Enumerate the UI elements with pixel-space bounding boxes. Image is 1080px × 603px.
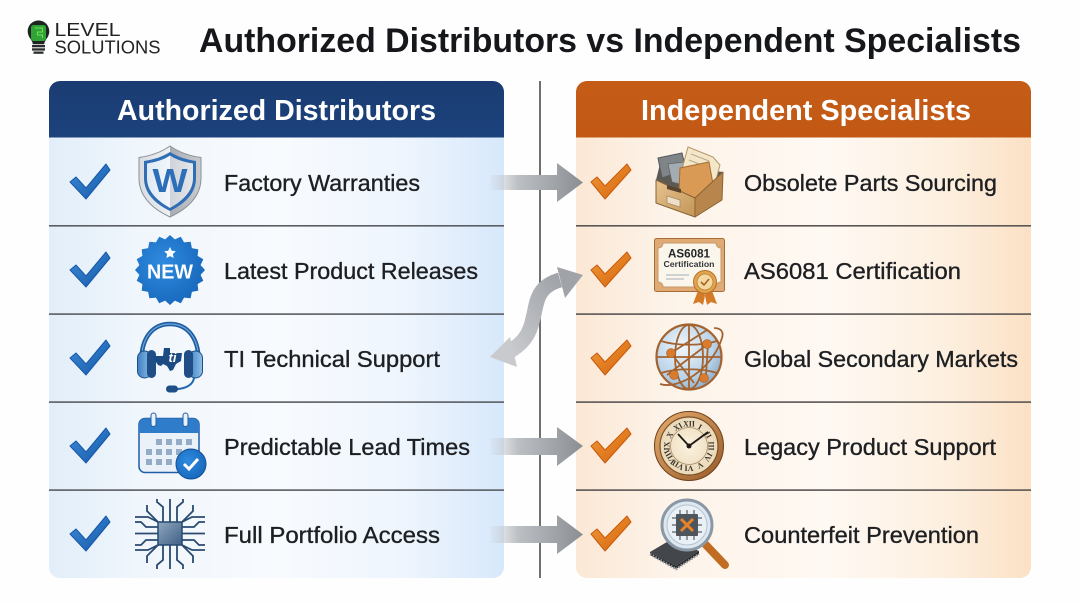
panel body <box>576 81 1031 578</box>
label: Latest Product Releases <box>224 258 478 284</box>
icon: certificate: AS6081 <box>668 248 711 260</box>
icon: globe <box>656 324 723 390</box>
panel body <box>49 81 504 578</box>
icon: microchip <box>135 499 205 569</box>
title: Authorized Distributors vs Independent Specialists <box>199 22 1021 60</box>
icon: file box <box>656 147 723 217</box>
label: Global Secondary Markets <box>744 346 1018 372</box>
logo <box>28 20 160 58</box>
logo wordmark <box>54 20 160 58</box>
panel: independent specialists <box>576 81 1031 578</box>
logo wordmark: LEVEL <box>54 20 120 40</box>
logo wordmark: SOLUTIONS <box>54 38 160 58</box>
center divider line <box>539 81 541 578</box>
check <box>70 164 110 199</box>
icon: warranty shield <box>139 146 201 217</box>
icon: antique clock: VII <box>671 458 685 472</box>
row: obsolete parts sourcing <box>591 147 997 217</box>
row: as6081 certification <box>591 238 961 305</box>
check <box>591 428 631 463</box>
arrow: lead times to legacy support <box>490 427 583 466</box>
label: Predictable Lead Times <box>224 434 470 460</box>
icon: new badge <box>135 235 205 305</box>
panel: authorized distributors <box>49 81 504 578</box>
label: Legacy Product Support <box>744 434 997 460</box>
check <box>591 340 631 375</box>
icon: certificate: Certification <box>664 259 714 269</box>
icon: headset <box>138 324 202 392</box>
heading: independent specialists: Independent Specialists <box>641 95 971 127</box>
heading: authorized distributors: Authorized Distributors <box>117 95 436 127</box>
arrow: factory warranties to obsolete parts <box>490 163 583 202</box>
icon: antique clock: IX <box>662 441 672 450</box>
icon: certificate <box>654 238 724 305</box>
check <box>70 252 110 287</box>
icon: antique clock: XI <box>672 421 684 433</box>
label: Obsolete Parts Sourcing <box>744 170 997 196</box>
label: TI Technical Support <box>224 346 441 372</box>
icon: calendar <box>139 413 206 479</box>
check <box>591 252 631 287</box>
label: Counterfeit Prevention <box>744 522 979 548</box>
label: AS6081 Certification <box>744 258 961 284</box>
check <box>591 516 631 551</box>
icon: antique clock: X <box>665 430 675 440</box>
icon: warranty shield: W <box>152 162 188 199</box>
check <box>70 516 110 551</box>
check <box>591 164 631 199</box>
arrow: portfolio to counterfeit prevention <box>490 515 583 554</box>
icon: antique clock: III <box>706 441 716 451</box>
icon: antique clock: VI <box>685 464 693 472</box>
icon: antique clock <box>654 412 724 480</box>
icon: headset: ti <box>169 350 177 365</box>
arrow: two-way curved arrow <box>490 267 583 367</box>
label: Full Portfolio Access <box>224 522 440 548</box>
icon: antique clock: IV <box>702 451 714 463</box>
icon: antique clock: V <box>695 460 705 471</box>
row: global secondary markets <box>591 324 1018 390</box>
row: latest product releases <box>70 235 478 305</box>
icon: new badge: NEW <box>147 262 193 284</box>
icon: antique clock: II <box>703 430 714 440</box>
icon: antique clock: VIII <box>662 448 678 466</box>
check <box>70 428 110 463</box>
row: predictable lead times <box>70 413 470 479</box>
icon: magnifier over chip <box>650 500 725 569</box>
label: Factory Warranties <box>224 170 420 196</box>
icon: antique clock: XII <box>683 420 695 428</box>
row: ti technical support <box>70 324 441 392</box>
icon: antique clock: I <box>696 422 704 432</box>
row: counterfeit prevention <box>591 500 979 569</box>
check <box>70 340 110 375</box>
icon: light bulb <box>28 20 49 54</box>
row: legacy product support <box>591 412 997 480</box>
row: full portfolio access <box>70 499 440 569</box>
row: factory warranties <box>70 146 420 217</box>
